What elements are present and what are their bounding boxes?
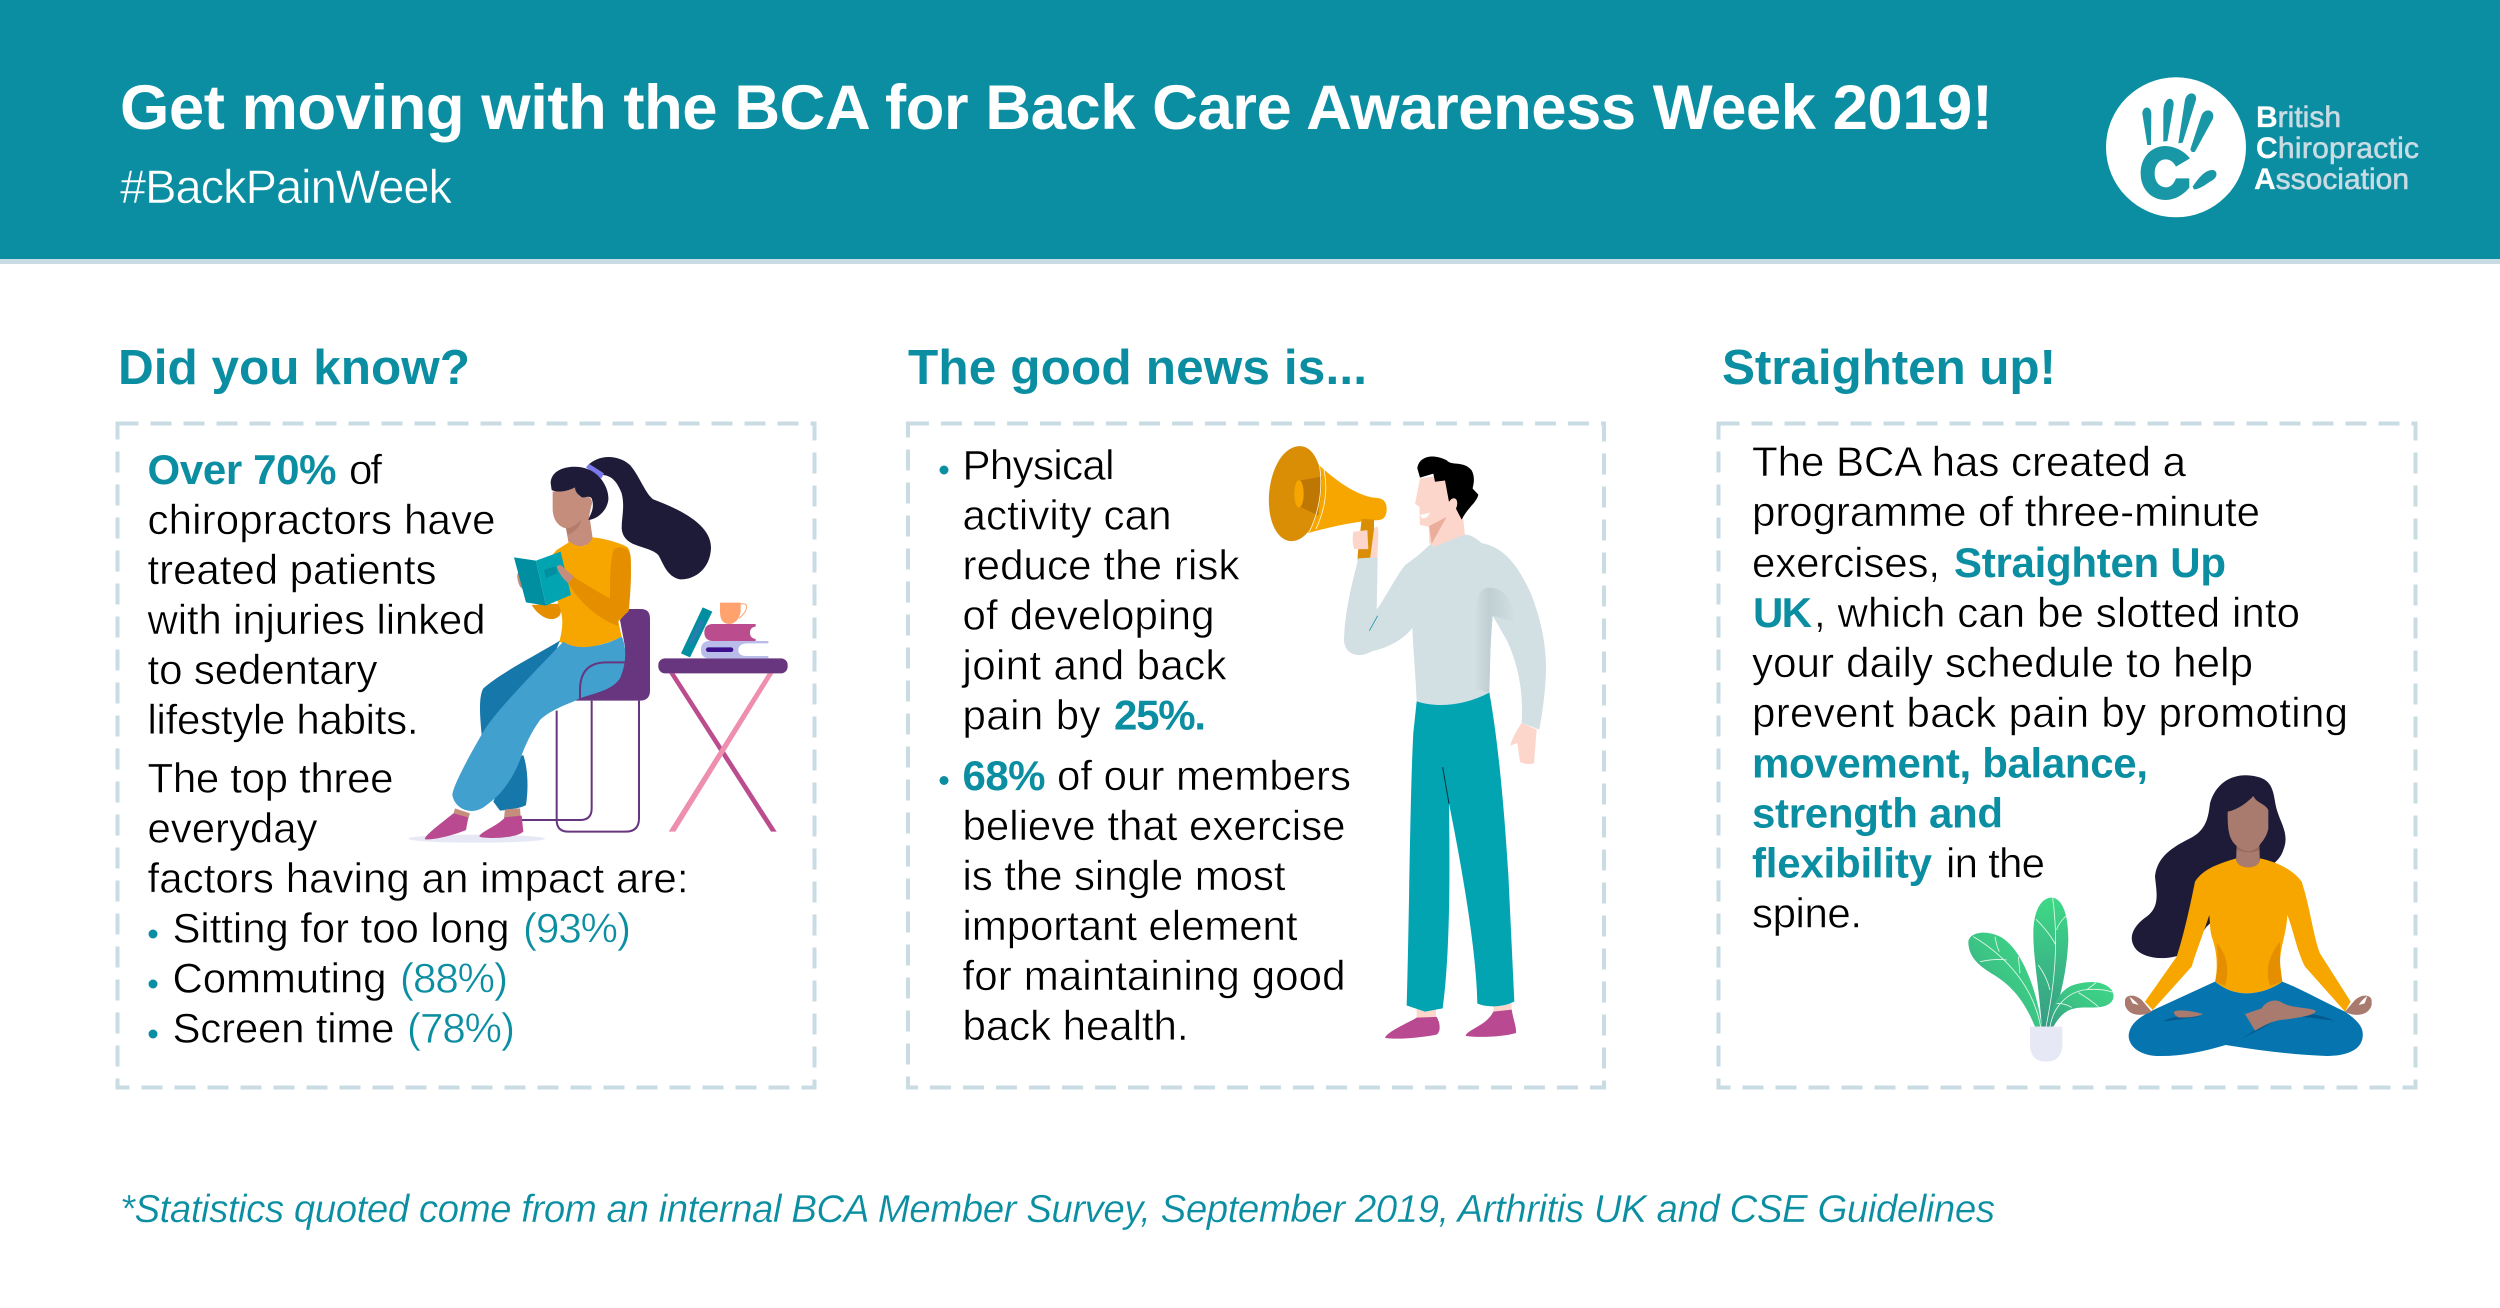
heading: Straighten up! (1722, 340, 2056, 395)
footnote: *Statistics quoted come from an internal BCA Member Survey, September 2019, Arthritis UK and CSE Guidelines (120, 1188, 1995, 1231)
logo wordmark (2254, 101, 2419, 196)
text block: movement, balance, (1752, 740, 2148, 786)
bullet: 68% of members (940, 752, 1351, 1049)
bullet: 68% of members: of our members (1057, 752, 1351, 799)
text block (1752, 438, 2348, 936)
text block: UK (1753, 589, 1812, 636)
text block (146, 446, 688, 902)
list of factors: (93%) (523, 904, 631, 952)
list of factors: Screen time (172, 1004, 394, 1052)
text block: chiropractors have (148, 496, 496, 543)
panel: Did you know? (118, 340, 814, 1088)
meditating woman (2125, 775, 2372, 1056)
text block: with injuries linked (146, 596, 486, 643)
bullet: physical activity: reduce the risk (962, 542, 1240, 588)
text block: your daily schedule to help (1752, 639, 2253, 686)
bullet: physical activity: pain by (962, 692, 1100, 738)
bullet: 68% of members: believe that exercise (962, 802, 1346, 849)
bullet: 68% of members: back health. (962, 1002, 1188, 1049)
heading: Did you know? (118, 340, 470, 395)
bullet: physical activity: Physical (962, 442, 1114, 488)
panel: Straighten up! (1718, 340, 2416, 1088)
header banner (0, 0, 2500, 264)
table (658, 658, 788, 832)
bullet: physical activity: activity can (962, 492, 1172, 538)
bullet: physical activity: of developing (962, 592, 1214, 638)
bullet: physical activity (940, 442, 1240, 738)
list of factors: Commuting (172, 954, 386, 1002)
illustration: man with megaphone (1269, 446, 1546, 1039)
text block: flexibility (1752, 840, 1933, 886)
text block: exercises, (1752, 539, 1940, 586)
text block: prevent back pain by promoting (1752, 689, 2348, 736)
text block: programme of three-minute (1752, 488, 2260, 535)
list of factors: Sitting for too long (172, 904, 510, 952)
bullet: 68% of members: important element (962, 902, 1298, 949)
text block: The top three (148, 754, 394, 802)
text block: lifestyle habits. (148, 696, 418, 743)
text block: treated patients (148, 546, 436, 593)
text block: of (349, 446, 382, 493)
plant (1968, 898, 2114, 1062)
text block: , which can be slotted into (1814, 589, 2300, 636)
megaphone (1269, 446, 1387, 572)
logo wordmark: Association (2254, 163, 2409, 196)
bullet: physical activity: 25%. (1114, 692, 1206, 738)
bullet: 68% of members: is the single most (962, 852, 1286, 899)
text block: Straighten Up (1954, 539, 2226, 586)
logo wordmark: Chiropractic (2256, 132, 2419, 165)
text block: spine. (1752, 890, 1862, 936)
chair (520, 609, 650, 832)
man (1344, 457, 1546, 1039)
list of factors: (88%) (400, 954, 508, 1002)
list of factors: (78%) (407, 1004, 515, 1052)
text block: in the (1946, 840, 2045, 886)
list of factors (148, 904, 631, 1052)
dashed box (908, 424, 1604, 1088)
illustration: plant and meditating woman (1968, 775, 2372, 1062)
text block: factors having an impact are: (148, 854, 688, 902)
title: Get moving with the BCA for Back Care Awareness Week 2019! (120, 73, 1993, 143)
icon: hand logo (2106, 77, 2246, 217)
text block: The BCA has created a (1752, 438, 2187, 485)
dashed box (118, 424, 814, 1088)
dashed box (1718, 424, 2416, 1088)
text block: everyday (148, 804, 318, 852)
hashtag: #BackPainWeek (120, 160, 452, 213)
bullet: 68% of members: 68% (962, 752, 1046, 799)
text block: to sedentary (148, 646, 378, 693)
text block: Over 70% (148, 446, 336, 493)
illustration: woman reading on a chair beside a table (408, 457, 788, 843)
text block: strength and (1752, 790, 2003, 836)
books and cup (681, 603, 768, 658)
woman (425, 457, 711, 839)
logo wordmark: British (2256, 101, 2341, 134)
bullet: 68% of members: for maintaining good (962, 952, 1346, 999)
panel: The good news is... (908, 340, 1604, 1088)
bullet: physical activity: joint and back (960, 642, 1228, 688)
logo: British Chiropractic Association (2106, 77, 2419, 217)
heading: The good news is... (908, 340, 1367, 395)
